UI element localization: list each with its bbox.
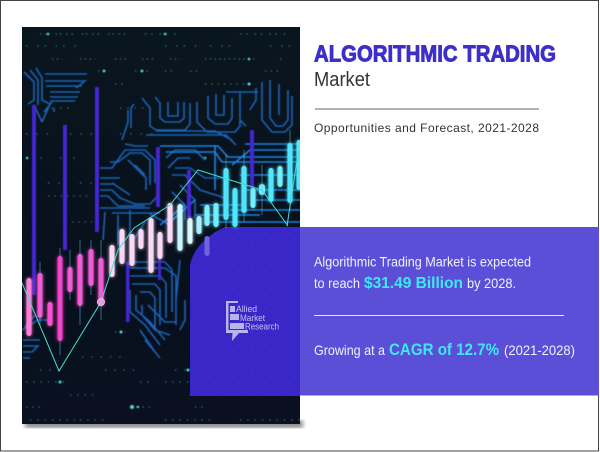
statistic: market size: $31.49 Billion — [364, 275, 463, 292]
trend line marker — [98, 298, 104, 306]
logo: Allied Market Research: Market — [240, 313, 265, 324]
purple vertical bars — [32, 87, 254, 322]
circuit traces — [22, 68, 292, 358]
statistic: CAGR: Growing at a — [314, 342, 385, 358]
bright circuit traces — [160, 144, 300, 225]
statistic: market size: by 2028. — [467, 275, 516, 291]
logo: Allied Market Research — [226, 301, 279, 341]
title: ALGORITHMIC TRADING — [314, 40, 556, 66]
data dot rows — [26, 34, 300, 420]
logo: Allied Market Research: Research — [245, 322, 279, 332]
candlesticks: light pink — [110, 203, 172, 277]
statistic: CAGR: CAGR of 12.7% — [389, 341, 499, 359]
candle wicks — [40, 130, 290, 355]
bright data dots — [26, 33, 250, 409]
blue overlay panel — [190, 227, 300, 396]
statistic: CAGR: (2021-2028) — [504, 342, 575, 358]
forecast period: Opportunities and Forecast, 2021-2028 — [314, 121, 539, 135]
panel: trading chart image — [22, 27, 302, 424]
image shadow — [25, 420, 303, 428]
divider — [315, 108, 539, 110]
muted candle over panel — [204, 236, 210, 256]
statistic: market size: Algorithmic Trading Market is expected — [314, 254, 531, 270]
statistic: market size — [314, 254, 531, 292]
subtitle: Market — [314, 69, 370, 91]
candlesticks: cyan — [178, 140, 302, 251]
candlesticks: pink — [26, 249, 104, 341]
trend line — [22, 150, 300, 371]
logo: Allied Market Research: Allied — [236, 304, 257, 315]
statistic: market size: to reach — [314, 275, 360, 291]
statistic: CAGR — [314, 341, 575, 359]
panel: market statistics — [300, 227, 599, 396]
